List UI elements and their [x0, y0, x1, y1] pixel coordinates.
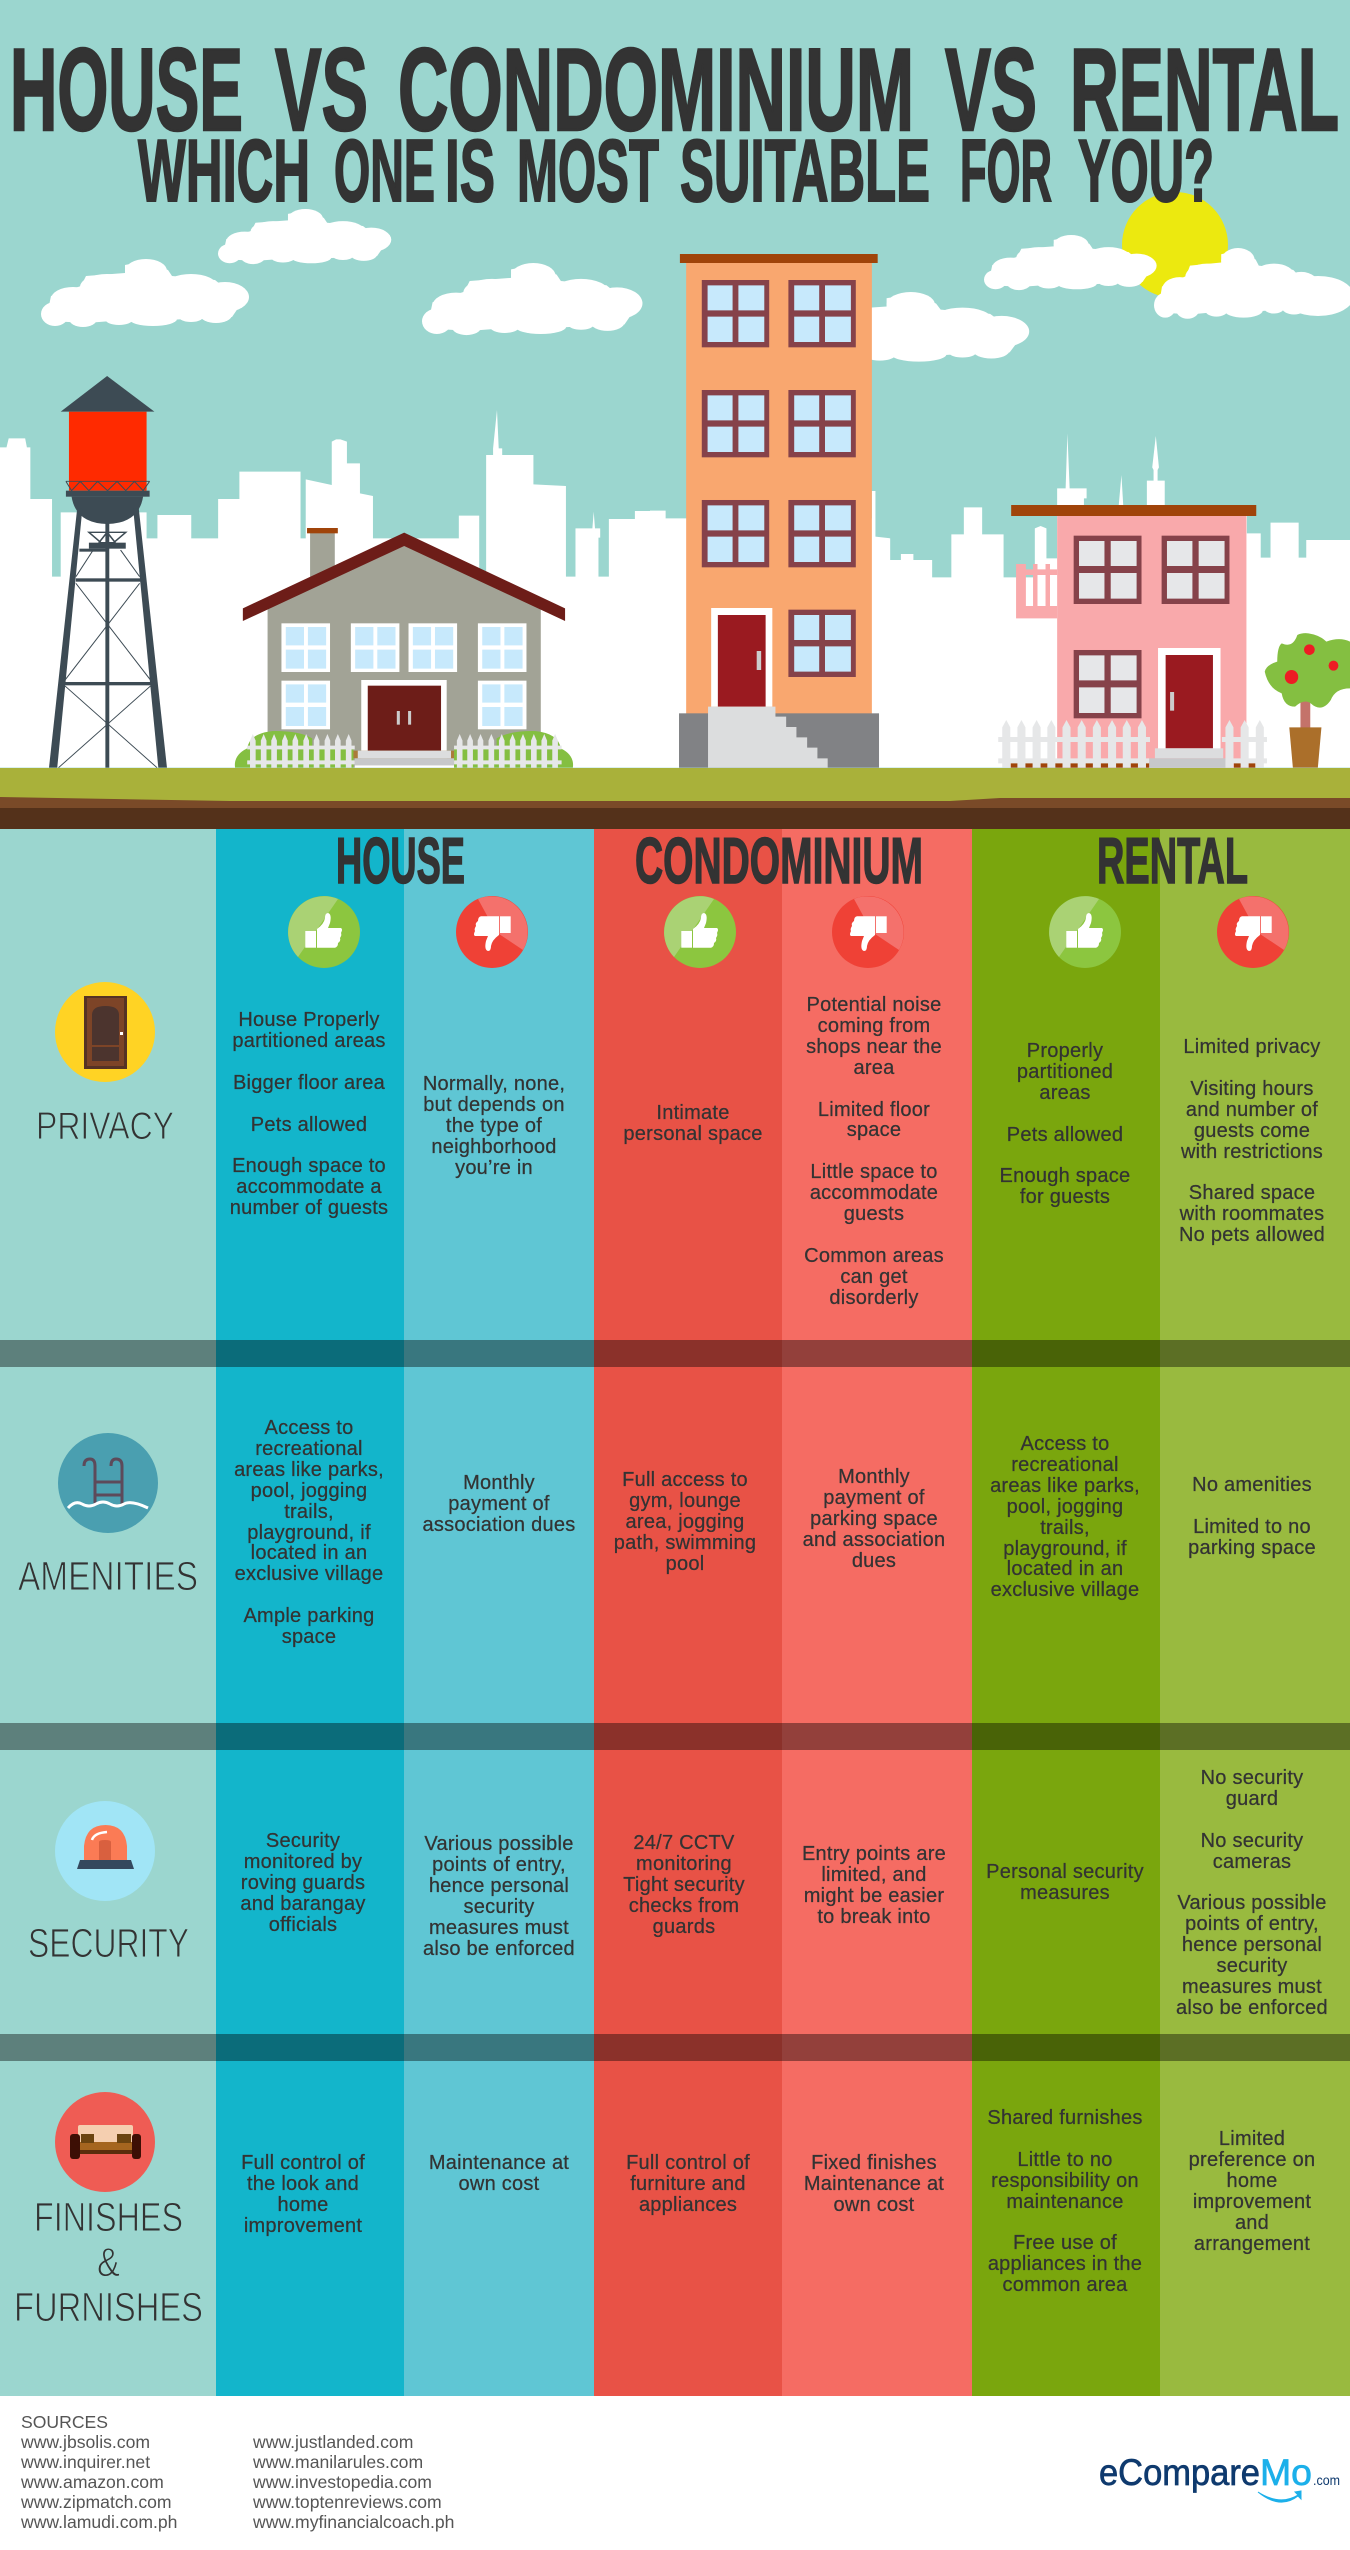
privacy: condominium cons: Limited floor: [818, 1099, 930, 1121]
security: rental cons: guard: [1226, 1788, 1278, 1810]
security: house pros: [240, 1830, 366, 1936]
main title: CONDOMINIUM: [398, 24, 914, 155]
privacy: house pros: [230, 1009, 388, 1219]
privacy: condominium cons: Potential noise: [807, 994, 941, 1016]
privacy: condominium cons: coming from: [818, 1015, 930, 1037]
finishes: rental pros: Free use of: [1013, 2232, 1117, 2254]
privacy: rental pros: Properly: [1027, 1040, 1103, 1062]
amenities: condominium pros: path, swimming: [614, 1532, 756, 1554]
security: condominium cons: might be easier: [804, 1885, 944, 1907]
icon: house thumbs down: [456, 896, 528, 968]
privacy: house cons: you’re in: [455, 1157, 533, 1179]
amenities: condominium pros: gym, lounge: [629, 1490, 741, 1512]
security: condominium pros: 24/7 CCTV: [633, 1832, 735, 1854]
amenities: house pros: Access to: [265, 1417, 353, 1439]
security: house cons: security: [464, 1896, 534, 1918]
label: finishes and furnishes: [14, 2194, 203, 2330]
security: rental cons: hence personal: [1182, 1934, 1322, 1956]
privacy: condominium pros: personal space: [623, 1123, 763, 1145]
amenities: rental pros: pool, jogging: [1007, 1496, 1123, 1518]
icon: pool ladder: [58, 1433, 158, 1533]
finishes: rental pros: appliances in the: [988, 2253, 1142, 2275]
subtitle: SUITABLE: [680, 121, 930, 220]
sources list column one: www.lamudi.com.ph: [21, 2512, 177, 2532]
finishes: house cons: own cost: [459, 2173, 539, 2195]
sources list column one: SOURCES: [21, 2412, 108, 2432]
privacy: rental cons: Shared space: [1189, 1182, 1315, 1204]
amenities: house cons: [422, 1472, 575, 1536]
amenities: rental pros: located in an: [1007, 1558, 1123, 1580]
finishes: rental cons: [1189, 2128, 1315, 2255]
amenities: house cons: association dues: [422, 1514, 575, 1536]
security: rental cons: points of entry,: [1185, 1913, 1319, 1935]
amenities: condominium pros: [614, 1469, 756, 1575]
privacy: rental pros: areas: [1039, 1082, 1091, 1104]
security: rental cons: No security: [1201, 1767, 1303, 1789]
sources list column one: [21, 2412, 177, 2532]
security: rental cons: also be enforced: [1176, 1997, 1328, 2019]
security: condominium cons: [802, 1843, 946, 1928]
logo: eCompareMo: .com: [1313, 2472, 1340, 2488]
clouds: [41, 209, 1350, 363]
security: house cons: [423, 1833, 575, 1960]
icon: condominium thumbs down: [832, 896, 904, 968]
amenities: house pros: space: [282, 1626, 336, 1648]
amenities: house pros: areas like parks,: [234, 1459, 384, 1481]
security: house cons: points of entry,: [432, 1854, 566, 1876]
main title: [10, 24, 1339, 155]
sources list column one: www.jbsolis.com: [21, 2432, 150, 2452]
amenities: rental pros: playground, if: [1003, 1538, 1127, 1560]
amenities: condominium cons: and association: [803, 1529, 945, 1551]
label: privacy: PRIVACY: [36, 1105, 174, 1148]
privacy: condominium cons: area: [853, 1057, 895, 1079]
potted apple tree: [1265, 633, 1350, 768]
amenities: rental pros: exclusive village: [991, 1579, 1139, 1601]
icon: alarm light: [55, 1801, 155, 1901]
privacy: house pros: Pets allowed: [251, 1114, 367, 1136]
sun: [1122, 192, 1228, 298]
amenities: house pros: Ample parking: [243, 1605, 375, 1627]
condominium building: [679, 254, 879, 768]
security: house cons: also be enforced: [423, 1938, 575, 1960]
privacy: house cons: Normally, none,: [423, 1073, 565, 1095]
security: rental cons: [1176, 1767, 1328, 2019]
security: condominium cons: Entry points are: [802, 1843, 946, 1865]
privacy: house cons: neighborhood: [431, 1136, 557, 1158]
security: rental pros: [986, 1861, 1144, 1904]
finishes: rental cons: home: [1226, 2170, 1278, 2192]
security: house pros: officials: [269, 1914, 337, 1936]
finishes: rental cons: improvement: [1193, 2191, 1311, 2213]
subtitle: WHICH: [138, 121, 310, 220]
finishes: rental pros: maintenance: [1006, 2191, 1124, 2213]
privacy: condominium cons: guests: [844, 1203, 904, 1225]
amenities: rental pros: recreational: [1011, 1454, 1119, 1476]
finishes: rental cons: preference on: [1189, 2149, 1315, 2171]
sources list column two: www.myfinancialcoach.ph: [253, 2512, 454, 2532]
icon: sofa: [55, 2092, 155, 2192]
amenities: condominium pros: Full access to: [622, 1469, 748, 1491]
finishes: rental pros: [987, 2107, 1143, 2296]
security: rental cons: cameras: [1213, 1851, 1291, 1873]
sources list column two: www.toptenreviews.com: [253, 2492, 442, 2512]
finishes: condominium cons: [804, 2152, 944, 2216]
privacy: rental cons: Visiting hours: [1190, 1078, 1314, 1100]
sources list column two: www.justlanded.com: [253, 2432, 413, 2452]
security: condominium cons: limited, and: [821, 1864, 927, 1886]
privacy: rental cons: with restrictions: [1181, 1141, 1323, 1163]
amenities: condominium pros: pool: [666, 1553, 704, 1575]
finishes: rental cons: Limited: [1219, 2128, 1285, 2150]
security: rental cons: security: [1217, 1955, 1287, 1977]
amenities: house pros: exclusive village: [235, 1563, 383, 1585]
sources list column two: [253, 2432, 454, 2532]
amenities: house pros: trails,: [284, 1501, 334, 1523]
main title: VS: [275, 24, 368, 155]
security: rental pros: Personal security: [986, 1861, 1144, 1883]
privacy: condominium cons: disorderly: [829, 1287, 919, 1309]
privacy: house cons: [423, 1073, 565, 1179]
security: condominium pros: [623, 1832, 745, 1938]
privacy: rental cons: No pets allowed: [1179, 1224, 1325, 1246]
label: security: SECURITY: [28, 1920, 189, 1966]
water tower: [49, 376, 167, 768]
finishes: house pros: [241, 2152, 365, 2237]
security: house pros: Security: [266, 1830, 340, 1852]
amenities: house pros: located in an: [251, 1542, 367, 1564]
amenities: house pros: recreational: [255, 1438, 363, 1460]
icon: rental thumbs up: [1049, 896, 1121, 968]
logo: eCompareMo: [1099, 2452, 1340, 2502]
amenities: rental pros: [990, 1433, 1140, 1601]
main title: VS: [945, 24, 1037, 155]
privacy: condominium cons: Common areas: [804, 1245, 944, 1267]
finishes: house pros: improvement: [244, 2215, 362, 2237]
label: finishes and furnishes: FINISHES: [34, 2194, 183, 2240]
security: house pros: monitored by: [244, 1851, 362, 1873]
privacy: rental pros: [1000, 1040, 1130, 1208]
icon: rental thumbs down: [1217, 896, 1289, 968]
security: house cons: Various possible: [424, 1833, 574, 1855]
security: rental cons: No security: [1201, 1830, 1303, 1852]
amenities: house cons: payment of: [448, 1493, 550, 1515]
column heading: rental: RENTAL: [1097, 824, 1248, 897]
finishes: condominium cons: own cost: [834, 2194, 914, 2216]
subtitle: ONE: [334, 121, 435, 220]
privacy: condominium pros: [623, 1102, 763, 1145]
amenities: house pros: pool, jogging: [251, 1480, 367, 1502]
logo: eCompareMo: eCompare: [1099, 2452, 1260, 2493]
finishes: condominium pros: furniture and: [630, 2173, 746, 2195]
sources list column one: www.inquirer.net: [21, 2452, 150, 2472]
subtitle: MOST: [517, 121, 659, 220]
label: amenities: AMENITIES: [18, 1553, 198, 1599]
subtitle: [138, 121, 1214, 220]
label: finishes and furnishes: FURNISHES: [14, 2284, 203, 2330]
privacy: rental pros: Pets allowed: [1007, 1124, 1123, 1146]
security: rental cons: measures must: [1182, 1976, 1322, 1998]
subtitle: FOR: [960, 121, 1052, 220]
privacy: house pros: House Properly: [238, 1009, 380, 1031]
logo: eCompareMo: Mo: [1260, 2452, 1312, 2493]
finishes: house pros: home: [277, 2194, 329, 2216]
rental house: [998, 505, 1267, 768]
security: condominium pros: Tight security: [623, 1874, 745, 1896]
privacy: rental cons: and number of: [1186, 1099, 1318, 1121]
security: condominium pros: monitoring: [636, 1853, 732, 1875]
icon: condominium thumbs up: [664, 896, 736, 968]
security: condominium pros: guards: [653, 1916, 715, 1938]
privacy: condominium cons: [804, 994, 944, 1309]
privacy: rental cons: [1179, 1036, 1325, 1246]
finishes: rental pros: Little to no: [1017, 2149, 1113, 2171]
house: [235, 528, 573, 768]
main title: HOUSE: [10, 24, 243, 155]
amenities: rental cons: parking space: [1188, 1537, 1316, 1559]
security: rental pros: measures: [1020, 1882, 1110, 1904]
privacy: rental pros: Enough space: [1000, 1165, 1130, 1187]
amenities: condominium cons: [803, 1466, 945, 1572]
privacy: house cons: but depends on: [423, 1094, 565, 1116]
security: house pros: roving guards: [241, 1872, 365, 1894]
sources list column two: www.manilarules.com: [253, 2452, 423, 2472]
privacy: house pros: Enough space to: [232, 1155, 386, 1177]
table columns: [0, 829, 1350, 2396]
privacy: house pros: number of guests: [230, 1197, 388, 1219]
security: house cons: hence personal: [429, 1875, 569, 1897]
finishes: house pros: Full control of: [241, 2152, 365, 2174]
privacy: condominium pros: Intimate: [656, 1102, 730, 1124]
privacy: house pros: accommodate a: [236, 1176, 382, 1198]
amenities: house pros: playground, if: [247, 1522, 371, 1544]
privacy: house pros: partitioned areas: [232, 1030, 386, 1052]
security: condominium pros: checks from: [629, 1895, 739, 1917]
privacy: house cons: the type of: [446, 1115, 542, 1137]
privacy: rental cons: Limited privacy: [1183, 1036, 1321, 1058]
finishes: house cons: [429, 2152, 569, 2195]
finishes: condominium cons: Maintenance at: [804, 2173, 944, 2195]
finishes: condominium pros: appliances: [639, 2194, 737, 2216]
icon: door: [55, 982, 155, 1082]
security: house cons: measures must: [429, 1917, 569, 1939]
sources list column one: www.zipmatch.com: [21, 2492, 172, 2512]
amenities: house cons: Monthly: [463, 1472, 535, 1494]
sources list column two: www.investopedia.com: [253, 2472, 432, 2492]
security: rental cons: Various possible: [1177, 1892, 1327, 1914]
sources list column one: www.amazon.com: [21, 2472, 164, 2492]
privacy: condominium cons: accommodate: [810, 1182, 938, 1204]
amenities: rental pros: Access to: [1021, 1433, 1109, 1455]
ground layers: [0, 768, 1350, 829]
finishes: house cons: Maintenance at: [429, 2152, 569, 2174]
subtitle: IS: [445, 121, 495, 220]
privacy: house pros: Bigger floor area: [233, 1072, 385, 1094]
privacy: condominium cons: can get: [840, 1266, 908, 1288]
subtitle: YOU?: [1078, 121, 1214, 220]
security: condominium cons: to break into: [817, 1906, 931, 1928]
amenities: house pros: [234, 1417, 384, 1648]
amenities: rental cons: [1188, 1474, 1316, 1559]
finishes: house pros: the look and: [247, 2173, 359, 2195]
privacy: rental pros: for guests: [1020, 1186, 1110, 1208]
amenities: condominium cons: payment of: [823, 1487, 925, 1509]
label: finishes and furnishes: &: [97, 2239, 120, 2285]
column heading: condominium: CONDOMINIUM: [635, 824, 923, 897]
amenities: rental pros: areas like parks,: [990, 1475, 1140, 1497]
security: house pros: and barangay: [240, 1893, 366, 1915]
amenities: condominium cons: dues: [852, 1550, 896, 1572]
privacy: condominium cons: Little space to: [810, 1161, 938, 1183]
amenities: condominium pros: area, jogging: [626, 1511, 744, 1533]
amenities: rental pros: trails,: [1040, 1517, 1090, 1539]
column heading: house: HOUSE: [336, 824, 465, 897]
privacy: condominium cons: space: [847, 1119, 901, 1141]
amenities: condominium cons: parking space: [810, 1508, 938, 1530]
privacy: rental cons: guests come: [1194, 1120, 1310, 1142]
privacy: condominium cons: shops near the: [806, 1036, 942, 1058]
sky background: [0, 0, 1350, 829]
finishes: rental pros: common area: [1002, 2274, 1128, 2296]
privacy: rental pros: partitioned: [1017, 1061, 1113, 1083]
privacy: rental cons: with roommates: [1180, 1203, 1324, 1225]
finishes: rental pros: responsibility on: [991, 2170, 1139, 2192]
finishes: rental cons: and: [1235, 2212, 1269, 2234]
finishes: condominium pros: [626, 2152, 750, 2216]
finishes: rental pros: Shared furnishes: [987, 2107, 1143, 2129]
amenities: rental cons: No amenities: [1192, 1474, 1312, 1496]
icon: house thumbs up: [288, 896, 360, 968]
finishes: condominium cons: Fixed finishes: [811, 2152, 937, 2174]
finishes: condominium pros: Full control of: [626, 2152, 750, 2174]
amenities: condominium cons: Monthly: [838, 1466, 910, 1488]
amenities: rental cons: Limited to no: [1193, 1516, 1311, 1538]
city skyline: [0, 410, 1350, 768]
finishes: rental cons: arrangement: [1194, 2233, 1310, 2255]
